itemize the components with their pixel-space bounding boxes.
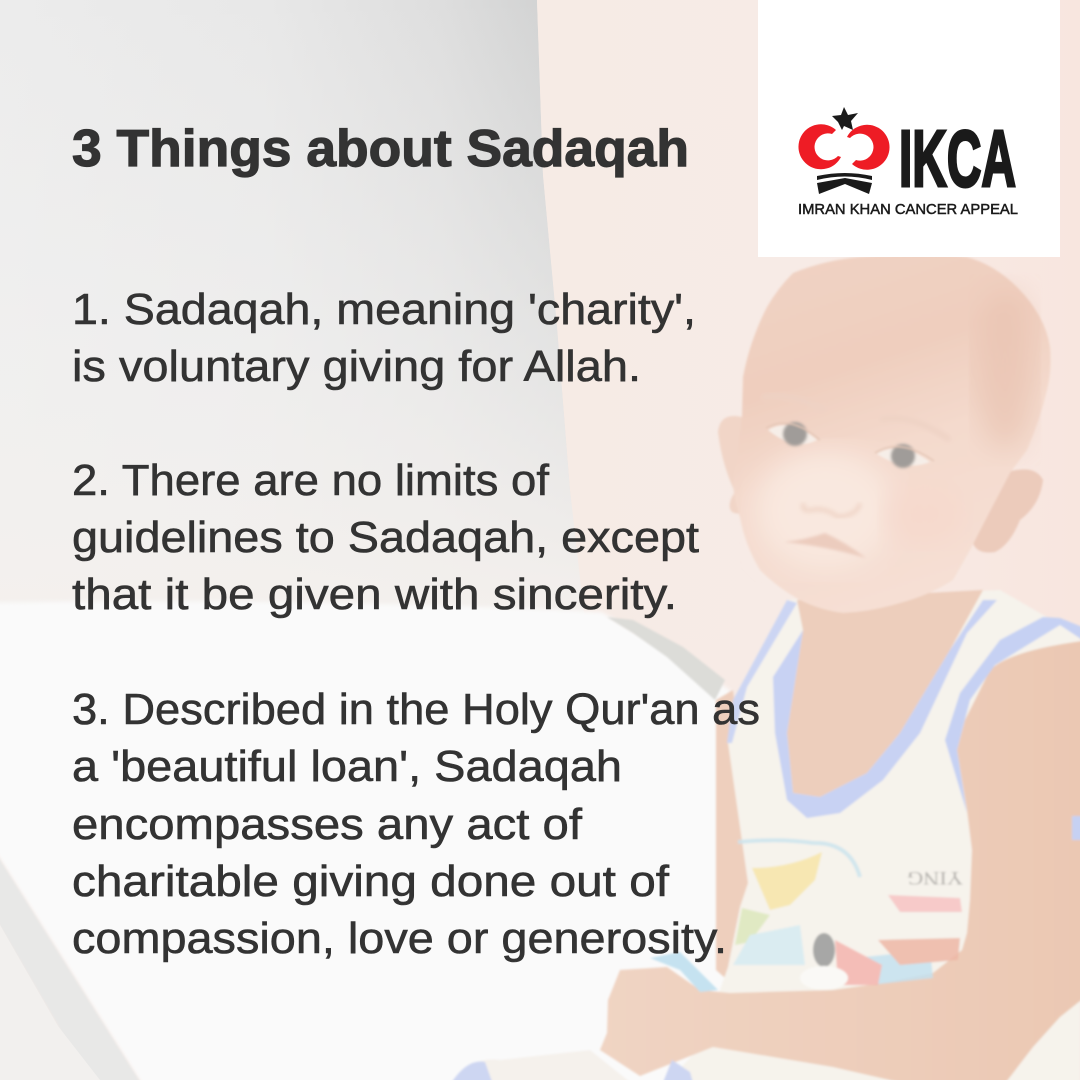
hem trim <box>447 1062 495 1080</box>
child figure <box>445 254 1080 1080</box>
dark cartoon <box>878 938 960 965</box>
ears <box>718 416 755 514</box>
right ear <box>972 469 1043 552</box>
sleeve trim <box>945 617 1080 813</box>
right eye <box>875 444 934 468</box>
title: 3 Things about Sadaqah <box>72 120 689 178</box>
IKCA logo <box>798 107 1018 218</box>
point 2 text: that it be given with sincerity. <box>72 570 677 619</box>
cheek tone <box>755 450 895 570</box>
neck and chest skin <box>787 590 983 797</box>
point 2 text: guidelines to Sadaqah, except <box>72 513 699 562</box>
point 1 text <box>72 285 696 391</box>
red print letters <box>888 895 962 912</box>
wristband <box>650 952 718 992</box>
point 2 text <box>72 456 699 619</box>
upper chevron band <box>817 173 872 180</box>
blue figure <box>855 950 933 985</box>
print outline <box>738 840 860 877</box>
point 1 text: 1. Sadaqah, meaning 'charity', <box>72 285 696 334</box>
shirt print <box>733 840 963 990</box>
eyebrows <box>762 396 950 440</box>
cheek blush <box>885 485 965 545</box>
star <box>832 107 858 130</box>
head and face <box>733 254 1051 613</box>
grey bed frame <box>0 812 158 1080</box>
grey wall <box>0 0 587 620</box>
logo panel <box>758 0 1060 257</box>
left eye <box>766 422 820 446</box>
sleeve edge <box>1072 816 1080 840</box>
shirt lettering: YING <box>907 867 963 888</box>
mouth <box>784 533 866 558</box>
right arm <box>600 640 1080 1080</box>
point 3 text: 3. Described in the Holy Qur'an as <box>72 685 760 734</box>
point 1 text: is voluntary giving for Allah. <box>72 342 641 391</box>
pink curtain <box>537 0 1080 640</box>
point 3 text <box>72 685 760 963</box>
blue cartoon <box>733 925 805 965</box>
lower shirt hem <box>445 1050 640 1080</box>
green patch <box>735 908 770 945</box>
red cartoon <box>835 940 882 985</box>
right red crescent <box>847 125 890 170</box>
hem trim right <box>660 1060 695 1080</box>
lower chevron band <box>817 178 872 194</box>
left arm <box>716 690 760 1000</box>
left red crescent <box>798 124 841 169</box>
dark bed edge <box>607 617 725 700</box>
collar trim <box>773 600 997 818</box>
point 3 text: encompasses any act of <box>72 800 583 849</box>
point 3 text: a 'beautiful loan', Sadaqah <box>72 742 622 791</box>
point 3 text: charitable giving done out of <box>72 857 670 906</box>
yellow cartoon <box>752 852 822 910</box>
black cartoon <box>813 933 835 967</box>
white bed <box>0 601 760 1080</box>
logo tagline: IMRAN KHAN CANCER APPEAL <box>798 201 1018 218</box>
left strap trim <box>727 600 797 743</box>
tank top <box>660 590 1080 1080</box>
white shoe <box>800 966 848 990</box>
floor corner <box>0 925 100 1080</box>
nose <box>803 503 860 517</box>
wall fade <box>0 0 587 620</box>
temple shade <box>975 290 1035 450</box>
point 2 text: 2. There are no limits of <box>72 456 550 505</box>
point 3 text: compassion, love or generosity. <box>72 914 727 963</box>
